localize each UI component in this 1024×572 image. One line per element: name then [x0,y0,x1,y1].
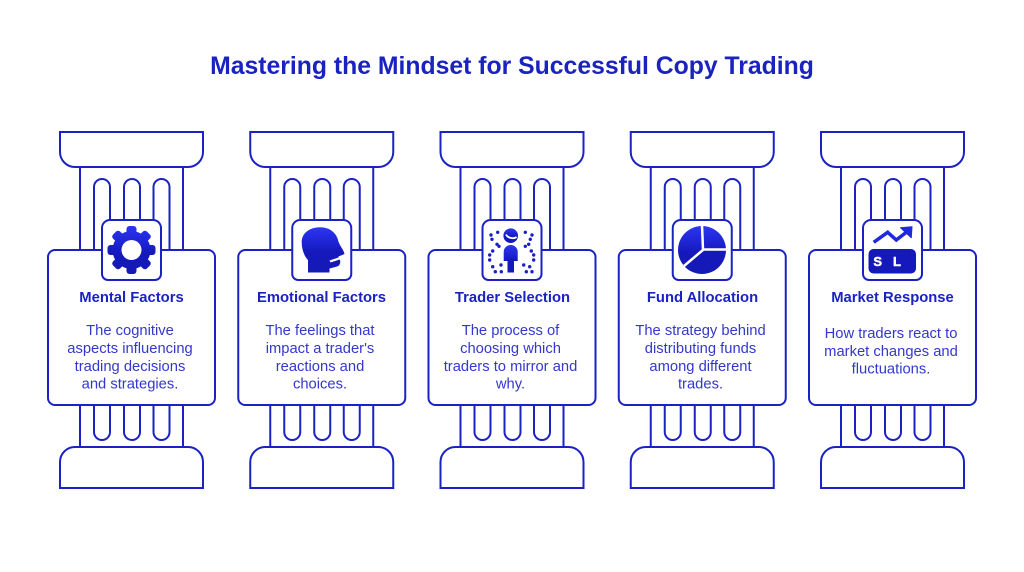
text: Emotional Factors description: choices. [293,376,347,392]
icon: gear [108,226,156,274]
panel: Emotional Factors [238,132,405,488]
panel: Trader Selection [428,132,596,488]
heading: Market Response: Market Response [831,290,954,306]
icon: market chart with stop-loss panel: L [893,254,901,269]
text: Trader Selection description: traders to mirror and [444,359,577,375]
text: Emotional Factors description: impact a trader's [266,341,374,357]
panel: Fund Allocation [619,132,786,488]
icon: trader with dotted selection [488,228,535,273]
column frame: Mental Factors [48,132,215,488]
heading: Fund Allocation: Fund Allocation [647,290,758,306]
heading: Emotional Factors: Emotional Factors [257,290,386,306]
title: Mastering the Mindset for Successful Copy Trading [210,53,814,80]
icon: pie chart [678,225,727,274]
column frame: Trader Selection [428,132,596,488]
text: Emotional Factors description: The feelings that [265,323,375,339]
text: Market Response description: How traders react to [825,326,957,342]
column frame: Fund Allocation [619,132,786,488]
column frame: Emotional Factors [238,132,405,488]
panel: Market Response [809,132,976,488]
text: Mental Factors description: The cognitive [86,323,174,339]
heading: Trader Selection: Trader Selection [455,290,570,306]
icon: market chart with stop-loss panel: S [873,254,882,269]
heading: Mental Factors: Mental Factors [79,290,184,306]
text: Fund Allocation description: among different [649,359,752,375]
icon: market chart with stop-loss panel [868,227,916,274]
text: Market Response description: fluctuations. [852,362,930,378]
text: Trader Selection description: why. [495,376,525,392]
text: Trader Selection description: The process of [462,323,560,339]
text: Market Response description: market changes and [824,344,958,360]
text: Mental Factors description: aspects influencing [67,341,193,357]
text: Mental Factors description: trading decisions [75,359,185,375]
text: Mental Factors description: and strategies. [82,376,178,392]
icon: speaking head [302,227,344,272]
column frame: Market Response [809,132,976,488]
text: Fund Allocation description: The strategy behind [635,323,766,339]
text: Fund Allocation description: distributing funds [645,341,756,357]
panel: Mental Factors [48,132,215,488]
text: Fund Allocation description: trades. [678,376,723,392]
text: Emotional Factors description: reactions and [276,359,364,375]
text: Trader Selection description: choosing which [460,341,561,357]
